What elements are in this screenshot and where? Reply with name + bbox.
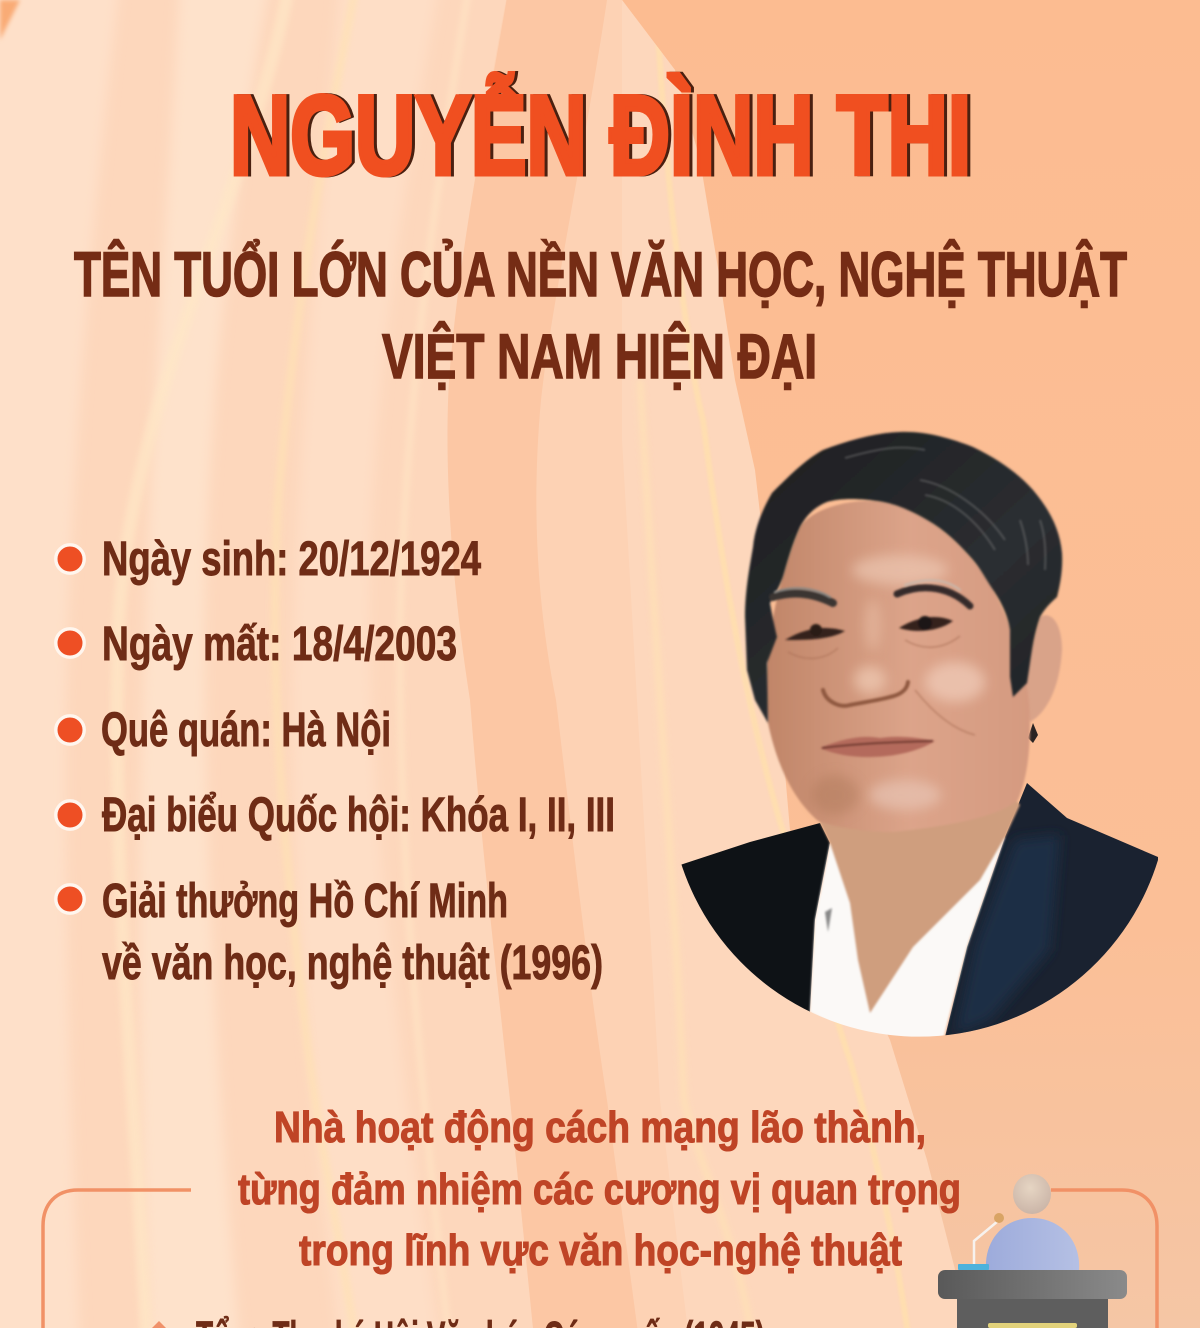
bullet: national assembly	[56, 789, 615, 842]
neck	[819, 800, 1022, 1014]
nose	[823, 682, 908, 706]
shirt	[810, 837, 1005, 1040]
bullet: hometown	[56, 704, 391, 757]
bullet: Ho Chi Minh prize: Giải thưởng Hồ Chí Minh	[102, 875, 508, 928]
section heading: Nhà hoạt động cách mạng lão thành,	[274, 1103, 926, 1152]
mouth	[820, 737, 935, 757]
face highlights	[811, 555, 985, 815]
section heading: từng đảm nhiệm các cương vị quan trọng	[238, 1165, 961, 1214]
bullet: birth date: Ngày sinh: 20/12/1924	[102, 533, 481, 586]
section heading	[238, 1103, 961, 1275]
frame left	[43, 1190, 191, 1328]
bullet: national assembly: Đại biểu Quốc hội: Khóa I, II, III	[102, 789, 615, 842]
portrait photo	[680, 432, 1158, 1045]
bullet: Ho Chi Minh prize	[56, 875, 603, 990]
hair	[745, 432, 1062, 723]
under-eye lines	[788, 636, 975, 735]
jacket lapel stripe	[955, 835, 1060, 1035]
ear lobe shadow	[1028, 723, 1038, 743]
biography list	[56, 533, 615, 990]
section heading: trong lĩnh vực văn học-nghệ thuật	[299, 1226, 902, 1275]
bullet: death date: Ngày mất: 18/4/2003	[102, 618, 457, 671]
bullet: birth date	[56, 533, 481, 586]
bullet: hometown: Quê quán: Hà Nội	[101, 704, 391, 757]
subtitle	[74, 239, 1127, 392]
frame right	[1051, 1190, 1157, 1328]
eyebrows	[773, 580, 970, 606]
title: NGUYỄN ĐÌNH THI	[230, 73, 971, 198]
list item partially cut off	[147, 1312, 765, 1328]
subtitle: VIỆT NAM HIỆN ĐẠI	[382, 321, 817, 392]
bullet: Ho Chi Minh prize: về văn học, nghệ thuật (1996)	[102, 937, 603, 990]
jacket right	[943, 783, 1158, 1045]
collar shadow	[825, 908, 832, 932]
ear	[1026, 614, 1063, 722]
jacket left	[682, 823, 830, 1012]
face	[765, 501, 1030, 832]
hair highlights	[845, 448, 1045, 570]
eyes	[785, 616, 953, 640]
icon: speaker at podium	[938, 1174, 1127, 1328]
